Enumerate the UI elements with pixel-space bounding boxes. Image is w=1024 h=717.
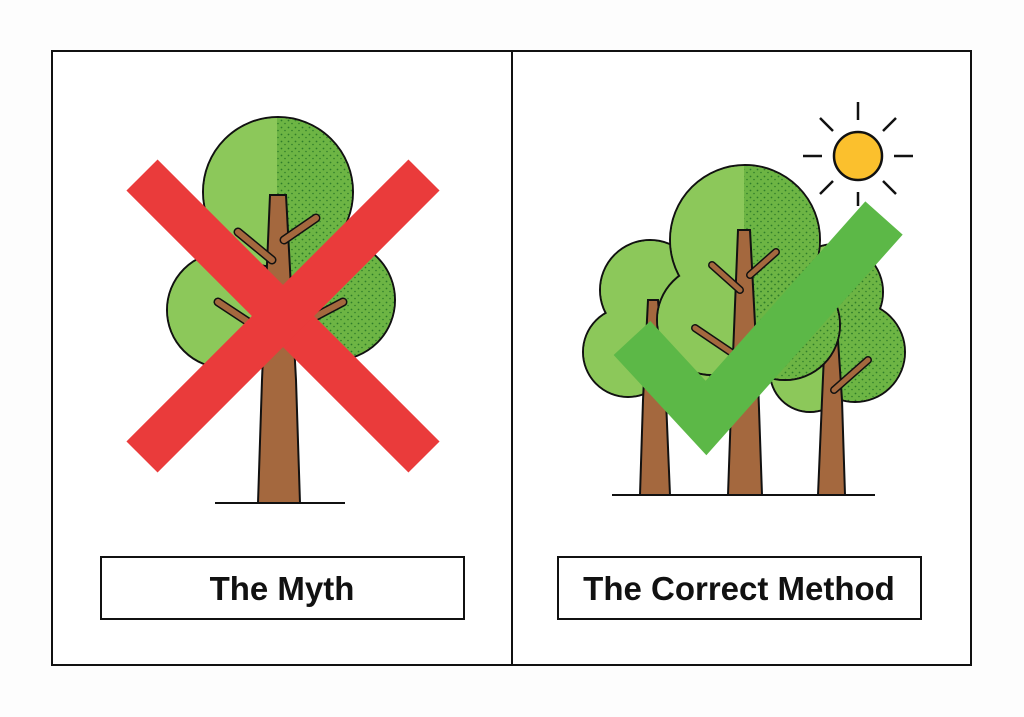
label: The Myth: The Myth [210,570,354,607]
panel: the correct method [558,102,921,619]
center tree [657,165,840,495]
back left tree [583,240,712,495]
panel: the myth [101,117,464,619]
label: The Correct Method: The Correct Method [583,570,895,607]
icon: sun [803,102,913,206]
back right tree [770,244,905,495]
icon: red X [142,175,424,457]
icon: three trees [583,165,905,495]
icon: green checkmark [632,218,884,418]
label: The Myth [101,557,464,619]
icon: single tree [167,117,395,503]
frame [52,51,971,665]
label: The Correct Method [558,557,921,619]
